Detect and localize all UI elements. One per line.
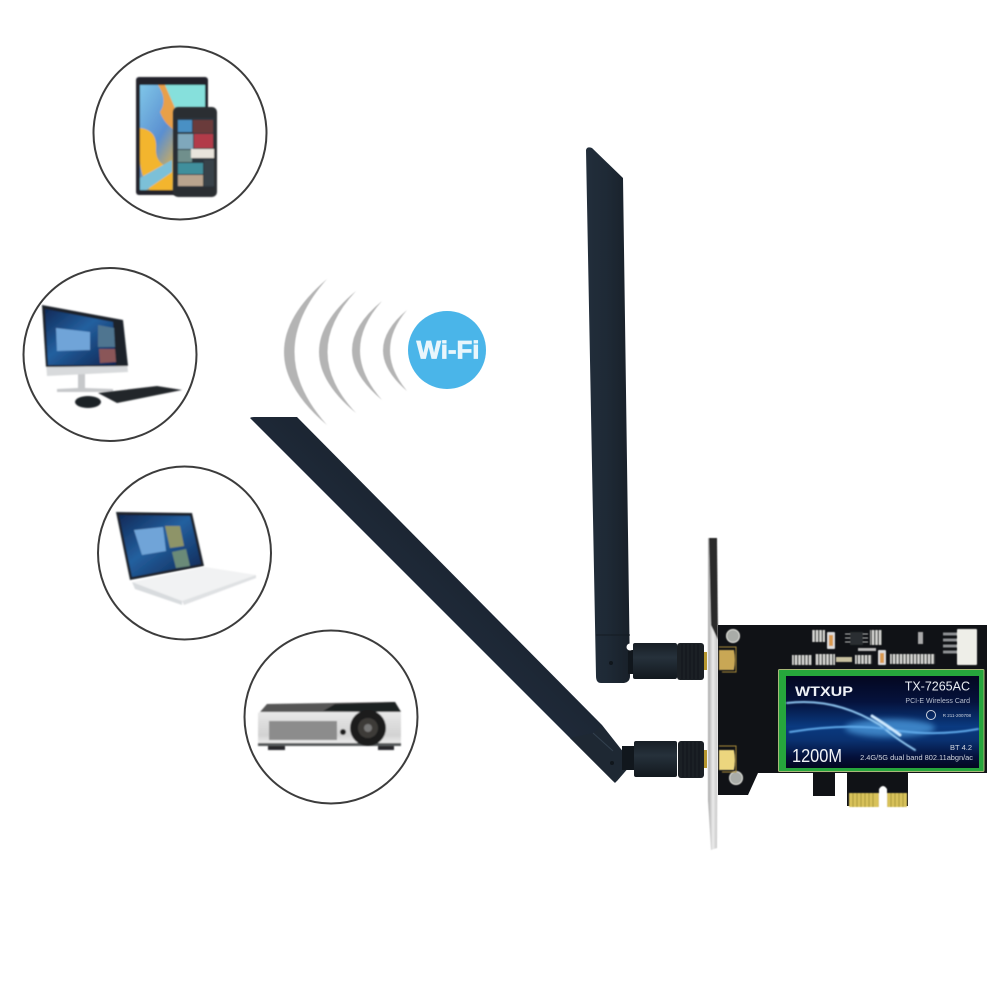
icon: wifi badge: [408, 311, 486, 389]
Bluetooth version: BT 4.2: [950, 743, 972, 752]
antenna: vertical: [586, 147, 707, 683]
antenna solder pads: [719, 647, 736, 772]
band specification: 2.4G/5G dual band 802.11abgn/ac: [860, 753, 973, 762]
gold edge connector: [849, 786, 907, 808]
certification mark: R 211-200708: [943, 713, 971, 718]
icon: wifi signal waves: [284, 279, 407, 425]
model number: TX-7265AC: [905, 680, 970, 694]
icon: tablet: [136, 77, 208, 195]
blue light streaks: [845, 719, 935, 737]
antenna: angled: [250, 417, 707, 783]
icon: keyboard and mouse: [75, 386, 182, 408]
panel: laptop circle: [98, 466, 271, 640]
screw holes: [726, 630, 742, 784]
certification mark: [926, 710, 971, 720]
brand name: WTXUP: [795, 683, 853, 699]
panel: desktop computer circle: [24, 268, 196, 441]
card label: [786, 676, 979, 768]
icon: phone: [173, 107, 217, 197]
connector: upper SMA: [633, 643, 707, 680]
panel: wireless card PCB: [718, 625, 987, 808]
speed: 1200M: [792, 746, 842, 766]
circuit board: [718, 625, 987, 806]
icon: laptop: [116, 512, 256, 605]
icon: projector: [258, 702, 401, 750]
icon: wifi badge: Wi-Fi: [416, 336, 480, 364]
icon: all-in-one desktop: [42, 305, 128, 392]
panel: tablet and phone circle: [94, 46, 266, 220]
bracket: metal mounting plate: [708, 538, 718, 850]
surface mounted components: [792, 629, 977, 665]
panel: projector circle: [244, 630, 418, 804]
connector: lower SMA: [634, 741, 707, 778]
module frame: [778, 670, 984, 772]
product type: PCI-E Wireless Card: [905, 698, 970, 705]
